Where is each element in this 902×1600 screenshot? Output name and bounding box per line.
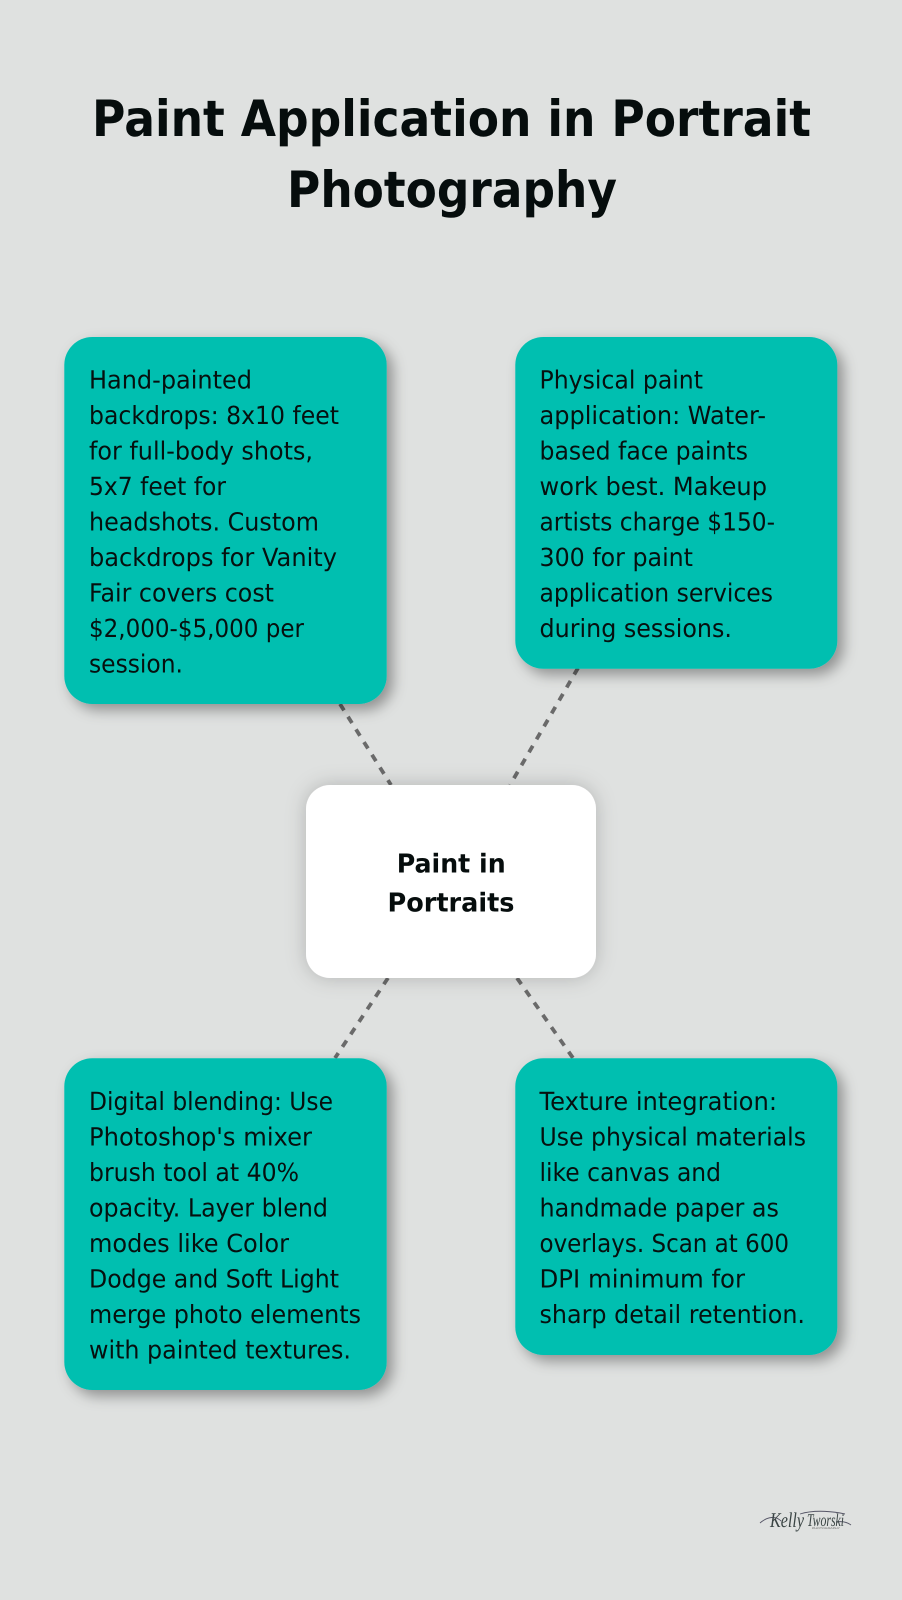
panel: hand-painted backdrops: Hand-painted <box>89 365 252 394</box>
panel: hand-painted backdrops: 5x7 feet for <box>89 472 227 501</box>
panel: physical paint application: artists charge $150- <box>540 507 775 536</box>
title: Paint Application in Portrait <box>92 90 811 148</box>
panel: digital blending: with painted textures. <box>89 1336 351 1364</box>
panel: physical paint application <box>515 337 837 669</box>
panel: texture integration <box>515 1058 837 1355</box>
panel: center hub: Portraits <box>388 889 514 919</box>
panel: digital blending: Photoshop's mixer <box>89 1122 313 1152</box>
panel: texture integration: overlays. Scan at 600 <box>540 1229 789 1258</box>
panel: center hub: Paint in <box>397 850 506 880</box>
panel: physical paint application: work best. Makeup <box>540 472 767 501</box>
logo: signature: PHOTOGRAPHY <box>812 1527 840 1530</box>
panel: hand-painted backdrops: $2,000-$5,000 per <box>89 614 305 643</box>
panel: center hub <box>306 785 596 978</box>
panel: physical paint application: based face paints <box>540 436 748 465</box>
panel: hand-painted backdrops: Fair covers cost <box>89 578 274 607</box>
title: Photography <box>287 161 617 219</box>
panel: hand-painted backdrops: for full-body shots, <box>89 436 313 465</box>
logo: signature <box>760 1508 851 1532</box>
panel: physical paint application: during sessions. <box>540 614 732 643</box>
panel: physical paint application: application: Water- <box>540 401 766 430</box>
panel: physical paint application: application services <box>540 578 773 607</box>
panel: texture integration: Texture integration: <box>539 1087 777 1116</box>
panel: digital blending: brush tool at 40% <box>89 1158 299 1187</box>
panel: texture integration: handmade paper as <box>540 1194 779 1222</box>
connector lines <box>335 668 578 1058</box>
panel: digital blending: modes like Color <box>89 1229 290 1258</box>
panel: hand-painted backdrops: headshots. Custom <box>89 507 319 536</box>
logo: signature: Kelly <box>769 1508 805 1532</box>
panel: hand-painted backdrops <box>64 337 387 704</box>
panel: digital blending: Dodge and Soft Light <box>89 1264 339 1294</box>
panel: texture integration: Use physical materials <box>540 1122 806 1152</box>
panel: digital blending: merge photo elements <box>89 1300 361 1329</box>
panel: digital blending <box>64 1058 387 1390</box>
panel: physical paint application: Physical paint <box>540 365 703 394</box>
panel: texture integration: DPI minimum for <box>540 1264 746 1294</box>
panel: hand-painted backdrops: backdrops: 8x10 feet <box>89 401 339 430</box>
panel: texture integration: sharp detail retention. <box>540 1300 805 1329</box>
panel: hand-painted backdrops: backdrops for Vanity <box>89 543 337 572</box>
panel: digital blending: opacity. Layer blend <box>89 1194 328 1222</box>
panel: hand-painted backdrops: session. <box>89 649 183 678</box>
panel: digital blending: Digital blending: Use <box>89 1087 333 1116</box>
logo: signature: Tworski <box>807 1510 844 1530</box>
panel: texture integration: like canvas and <box>540 1158 721 1187</box>
panel: physical paint application: 300 for paint <box>540 543 693 572</box>
title <box>92 90 811 219</box>
